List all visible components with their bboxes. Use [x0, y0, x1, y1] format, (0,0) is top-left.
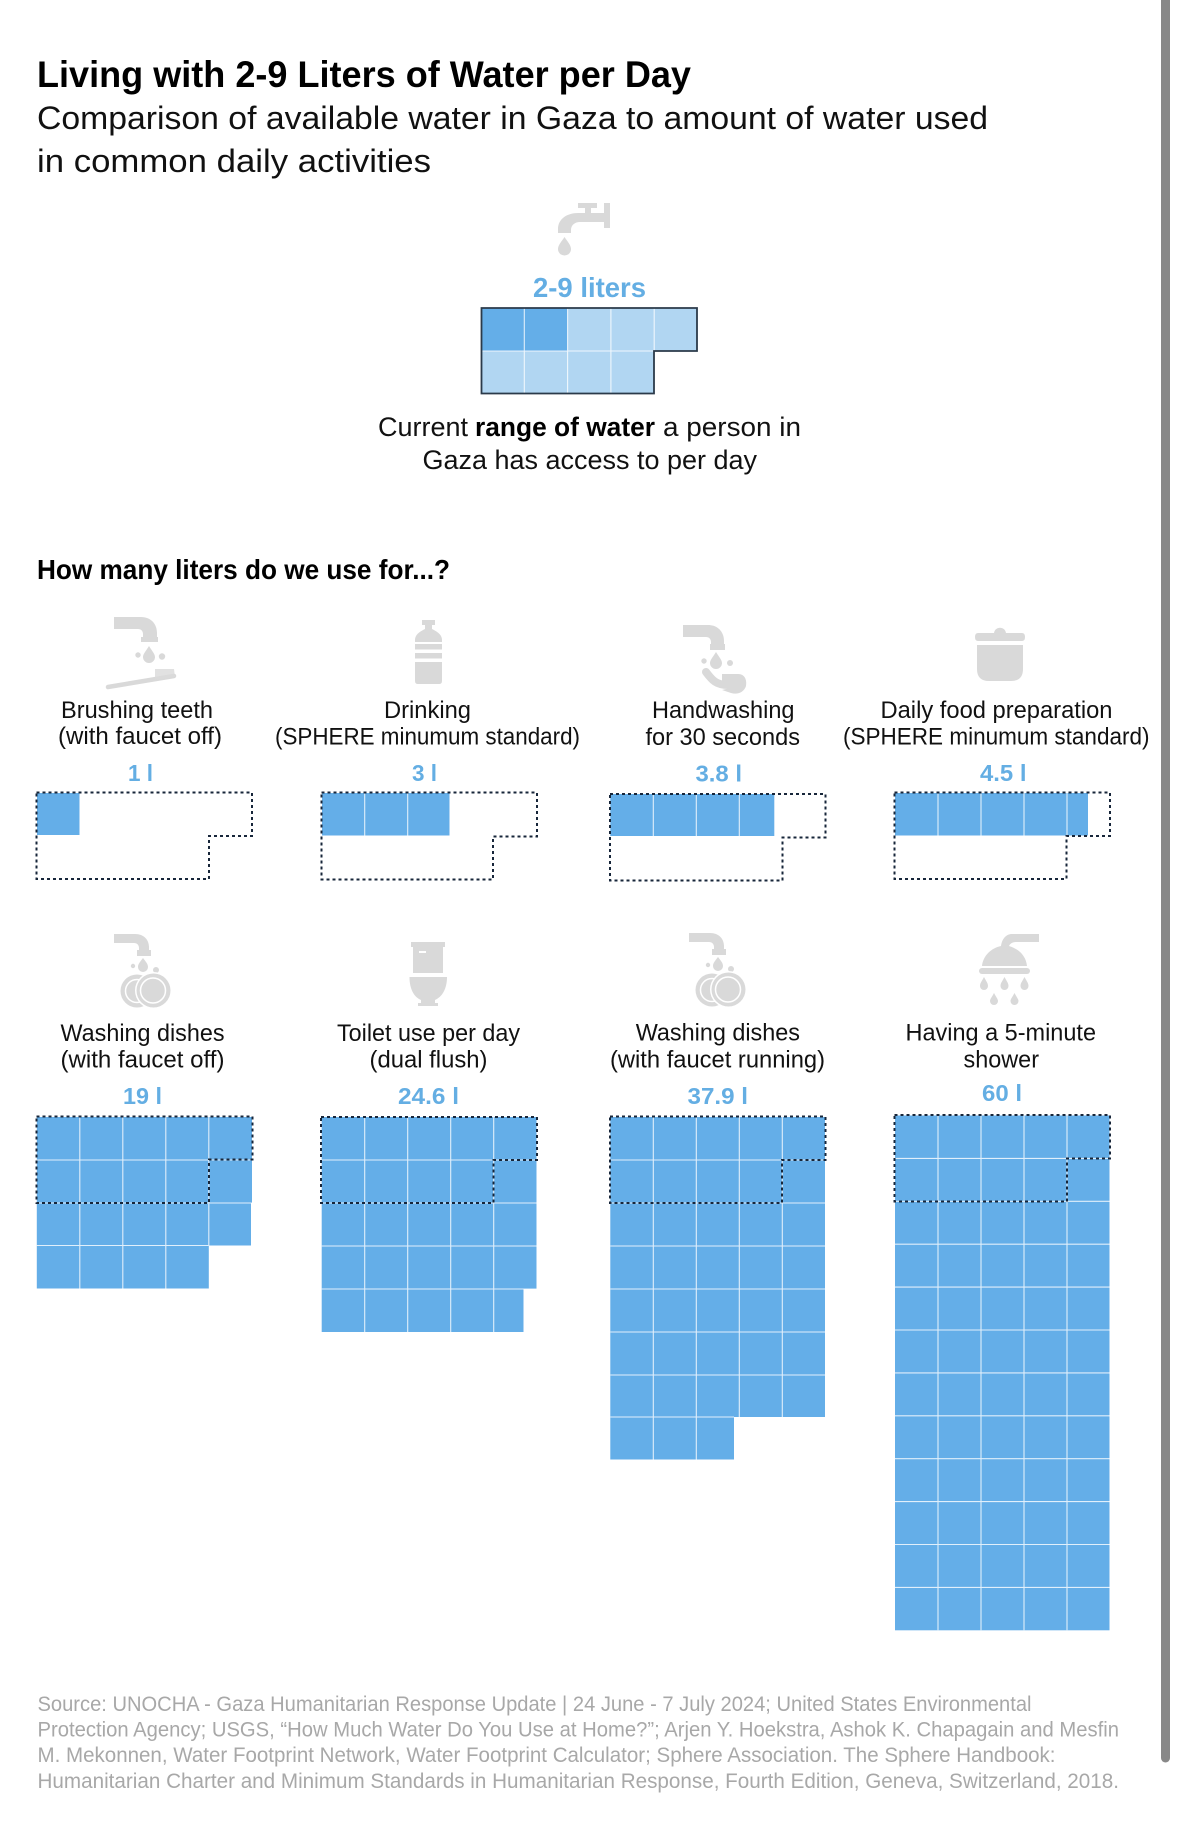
icon: faucet and toothbrush [108, 617, 175, 687]
label [646, 697, 800, 751]
scrollbar [1161, 0, 1170, 1762]
unit grid [36, 1116, 252, 1288]
subtitle [37, 100, 988, 179]
icon: faucet and dishes [689, 933, 747, 1008]
panel: washing dishes, faucet running [610, 933, 826, 1460]
source note: Source: UNOCHA - Gaza Humanitarian Response Update | 24 June - 7 July 2024; United States Environmental [38, 1692, 1032, 1716]
value: 19 l [123, 1083, 162, 1109]
label: Brushing teeth [61, 697, 213, 724]
source note: M. Mekonnen, Water Footprint Network, Water Footprint Calculator; Sphere Association. The Sphere Handbook: [38, 1743, 1056, 1767]
caption: range of water: range of water [475, 412, 655, 442]
icon: toilet [410, 942, 447, 1006]
heading: how many liters: How many liters do we use for...? [37, 554, 450, 585]
panel: handwashing [610, 625, 826, 880]
label: (with faucet off) [60, 1046, 224, 1074]
panel: current water range [378, 203, 801, 475]
label: Toilet use per day [337, 1020, 520, 1047]
label: Daily food preparation [880, 697, 1112, 724]
label: (with faucet off) [58, 723, 222, 750]
label [58, 697, 222, 750]
unit grid [610, 1116, 826, 1460]
unit grid [894, 1115, 1110, 1630]
icon: faucet and dishes [114, 934, 172, 1009]
value: 2-9 liters: 2-9 liters [533, 272, 646, 303]
panel: washing dishes, faucet off [36, 934, 252, 1288]
panel: toilet use [321, 942, 537, 1332]
value: 24.6 l [398, 1083, 459, 1109]
source note: Humanitarian Charter and Minimum Standards in Humanitarian Response, Fourth Edition, Geneva, Switzerland, 2018. [38, 1769, 1119, 1793]
value: 1 l [128, 760, 153, 786]
panel: daily food preparation [843, 628, 1150, 879]
caption: range of water: Current [378, 412, 469, 442]
label: for 30 seconds [646, 724, 800, 751]
unit grid [321, 1117, 537, 1332]
panel: brushing teeth [36, 617, 252, 879]
icon: cooking pot [975, 628, 1025, 681]
caption: range of water: Gaza has access to per day [422, 445, 758, 475]
unit grid [610, 794, 826, 880]
icon: tap with drop [558, 203, 610, 256]
label [843, 697, 1150, 750]
panel: 5-minute shower [894, 934, 1110, 1630]
subtitle: in common daily activities [37, 143, 431, 179]
label: (dual flush) [370, 1046, 488, 1074]
unit grid [894, 792, 1110, 879]
value: 3 l [412, 760, 437, 786]
label [906, 1020, 1096, 1074]
unit grid [36, 792, 252, 879]
subtitle: Comparison of available water in Gaza to amount of water used [37, 100, 988, 136]
panel: drinking [275, 620, 580, 880]
icon: faucet and hand [683, 625, 746, 694]
label [60, 1020, 224, 1074]
title: Living with 2-9 Liters of Water per Day [37, 54, 691, 95]
value: 60 l [982, 1080, 1022, 1106]
water range grid [482, 308, 697, 394]
label: Washing dishes [60, 1020, 224, 1047]
label: Drinking [384, 697, 471, 724]
label: Having a 5-minute [906, 1020, 1096, 1046]
value: 3.8 l [696, 760, 742, 786]
label: (with faucet running) [610, 1046, 825, 1074]
label: (SPHERE minumum standard) [843, 724, 1150, 750]
caption: range of water: a person in [663, 412, 801, 442]
label: Handwashing [652, 697, 794, 724]
value: 4.5 l [980, 760, 1026, 786]
label [275, 697, 580, 750]
source note [38, 1692, 1119, 1793]
label: Washing dishes [636, 1020, 800, 1046]
label [337, 1020, 520, 1074]
label: shower [964, 1046, 1039, 1074]
icon: bottle [415, 620, 442, 684]
caption: range of water [378, 412, 801, 475]
value: 37.9 l [688, 1083, 748, 1109]
label [610, 1020, 825, 1074]
unit grid [322, 792, 537, 880]
label: (SPHERE minumum standard) [275, 724, 580, 750]
source note: Protection Agency; USGS, “How Much Water Do You Use at Home?”; Arjen Y. Hoekstra, Ashok K. Chapagain and Mesfin [38, 1718, 1119, 1742]
icon: shower head [979, 934, 1039, 1005]
